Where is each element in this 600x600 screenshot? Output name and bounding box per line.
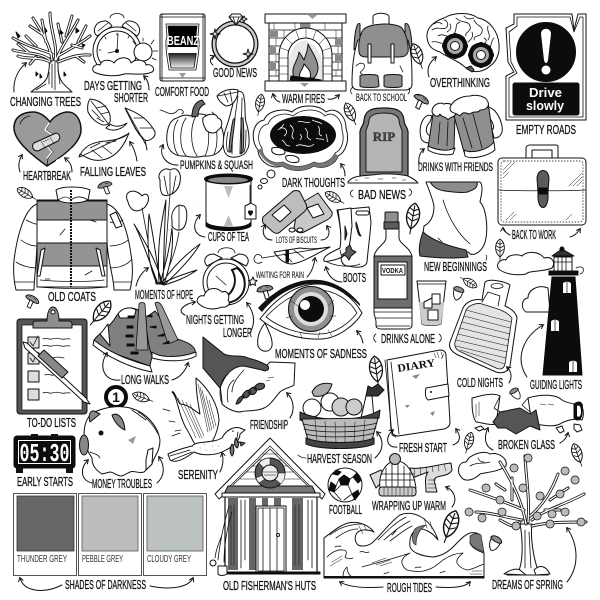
icon: leaf above basket — [368, 355, 385, 388]
icon: mushroom by heart — [97, 180, 114, 196]
label: to-do lists: TO-DO LISTS — [27, 415, 76, 430]
illustration: broken bottle — [472, 394, 584, 434]
icon: leaf by coat — [15, 185, 38, 203]
label: old fishermans huts: OLD FISHERMAN'S HUTS — [223, 578, 316, 593]
icon: leaf by pregnant belly — [404, 202, 422, 235]
illustration: alarm clock with sun — [93, 14, 158, 76]
text: MONEY TROUBLES — [92, 476, 152, 491]
illustration: gravestone — [348, 108, 418, 183]
illustration: backpack — [352, 13, 412, 90]
illustration: clipboard — [17, 307, 90, 414]
illustration: fireplace — [265, 14, 346, 91]
icon: leaf near brain — [408, 42, 427, 70]
icon: leaf near acorn — [458, 274, 479, 290]
label: waiting for rain: WAITING FOR RAIN — [256, 270, 304, 281]
label: drinks with friends: DRINKS WITH FRIENDS — [418, 160, 493, 174]
illustration: dove — [163, 378, 245, 461]
illustration: drive slowly sign: Drive — [529, 85, 562, 100]
icon: acorn by tree — [485, 534, 503, 553]
illustration: diary: DIARY — [397, 357, 436, 375]
label: heartbreak: HEARTBREAK — [23, 168, 71, 183]
illustration: changing trees — [13, 13, 90, 92]
icon: mushroom — [410, 92, 430, 112]
illustration: night alarm clock with moon — [197, 248, 257, 309]
label: days getting shorter: DAYS GETTING — [84, 78, 142, 93]
label: nights getting longer — [186, 312, 252, 340]
label: warm fires: WARM FIRES — [282, 91, 325, 106]
label: shades of darkness: SHADES OF DARKNESS — [65, 577, 146, 592]
illustration: diary — [385, 350, 450, 437]
label: old coats: OLD COATS — [48, 289, 96, 304]
illustration: beans can — [160, 14, 205, 81]
icon: birch leaf — [341, 101, 360, 127]
illustration: falling leaves — [79, 99, 155, 160]
illustration: brain with cogs — [427, 14, 499, 72]
illustration: piggy bank with coin — [80, 386, 160, 476]
icon: oak leaf — [85, 297, 115, 329]
swatch: pebble grey: PEBBLE GREY — [82, 554, 123, 565]
illustration: hot water bottle — [449, 280, 517, 373]
illustration: football — [328, 468, 362, 502]
illustration: rough waves — [324, 513, 484, 578]
illustration: pregnant belly — [419, 182, 487, 258]
label: good news: GOOD NEWS — [213, 65, 257, 80]
label: falling leaves: FALLING LEAVES — [80, 164, 146, 179]
illustration: digital clock: 05:30 — [20, 439, 70, 469]
label: boots: BOOTS — [343, 270, 366, 285]
illustration: biscuits — [262, 190, 332, 234]
illustration: handshake — [203, 337, 295, 412]
label: harvest season: HARVEST SEASON — [307, 451, 372, 466]
icon: leaf beside broken glass — [461, 431, 476, 454]
illustration: clinking beer mugs — [420, 95, 502, 158]
illustration: dark thoughts cloud — [253, 106, 348, 189]
label: bad news: BAD NEWS — [358, 187, 406, 202]
label: wrapping up warm: WRAPPING UP WARM — [372, 498, 446, 513]
swatch: pebble grey — [78, 494, 142, 576]
label: pumpkins and squash: PUMPKINS & SQUASH — [180, 160, 253, 172]
swatch: thunder grey: THUNDER GREY — [17, 554, 67, 565]
illustration: crocus flowers — [127, 169, 200, 285]
label: changing trees: CHANGING TREES — [10, 94, 81, 109]
illustration: lighthouse — [498, 247, 583, 375]
label: early starts: EARLY STARTS — [17, 474, 73, 489]
icon: mushroom by eye — [256, 284, 274, 300]
illustration: digital clock — [14, 434, 75, 473]
icon: leaf with acorn cluster — [496, 239, 504, 261]
label: drinks alone: DRINKS ALONE — [381, 331, 435, 346]
icon: small dark leaf — [253, 93, 266, 116]
label: back to school: BACK TO SCHOOL — [356, 92, 407, 104]
label: serenity: SERENITY — [178, 467, 218, 482]
icon: leaf by waves — [438, 509, 462, 545]
illustration: drive slowly sign: slowly — [526, 98, 565, 113]
swatch: cloudy grey: CLOUDY GREY — [147, 554, 191, 565]
text: LOTS OF BISCUITS — [276, 235, 317, 246]
label: comfort food: COMFORT FOOD — [155, 84, 209, 99]
illustration: puffer coat — [14, 187, 132, 290]
illustration: vodka bottle: VODKA — [382, 266, 403, 275]
icon: leaf at right edge — [569, 442, 586, 468]
label: days getting shorter: SHORTER — [114, 90, 148, 105]
label: nights getting longer: LONGER — [223, 325, 252, 340]
icon: leaf below cloud — [323, 189, 346, 207]
illustration: drive slowly sign — [506, 14, 586, 120]
illustration: vodka bottle — [374, 212, 412, 329]
text: FOOTBALL — [329, 502, 362, 517]
label: long walks: LONG WALKS — [121, 372, 169, 387]
icon: mushroom by clipboard — [22, 293, 40, 311]
illustration: harvest basket — [300, 364, 384, 448]
label: broken glass: BROKEN GLASS — [498, 437, 555, 452]
illustration: whisky glass — [417, 281, 446, 326]
illustration: pumpkin and squash — [160, 89, 249, 157]
illustration: wellington boots — [324, 207, 371, 267]
swatch: cloudy grey — [144, 494, 206, 576]
illustration: piggy bank with coin: 1 — [112, 389, 120, 405]
icon: acorn and leaf — [450, 285, 465, 301]
illustration: walking boots — [93, 302, 196, 372]
label: new beginnings: NEW BEGINNINGS — [424, 259, 487, 274]
icon: acorn above broken glass — [509, 387, 523, 402]
label: fresh start: FRESH START — [399, 440, 447, 455]
text: MOMENTS OF HOPE — [135, 287, 193, 302]
illustration: blossoming tree — [459, 452, 586, 575]
illustration: heart with bandage — [14, 112, 81, 166]
illustration: umbrella — [254, 247, 330, 264]
illustration: tin mug with tea bag — [194, 174, 256, 230]
illustration: bobble hat and scarf — [370, 454, 452, 496]
illustration: ring — [210, 14, 256, 65]
text: FRIENDSHIP — [250, 417, 288, 432]
illustration: briefcase — [498, 145, 586, 225]
text: CUPS OF TEA — [208, 229, 249, 244]
label: dark thoughts: DARK THOUGHTS — [282, 175, 345, 190]
label: overthinking: OVERTHINKING — [430, 75, 490, 90]
illustration: gravestone: RIP — [373, 129, 395, 144]
illustration: crying eye — [258, 280, 362, 351]
label: nights getting longer: NIGHTS GETTING — [186, 312, 244, 327]
icon: small leaf by money — [131, 390, 154, 405]
label: days getting shorter — [84, 78, 148, 105]
illustration: beans can: BEANZ — [167, 33, 199, 48]
label: moments of sadness: MOMENTS OF SADNESS — [275, 346, 367, 361]
illustration: beach hut — [210, 438, 325, 576]
label: rough tides: ROUGH TIDES — [387, 580, 432, 595]
swatch: thunder grey — [14, 494, 76, 576]
label: cold nights: COLD NIGHTS — [457, 375, 503, 390]
